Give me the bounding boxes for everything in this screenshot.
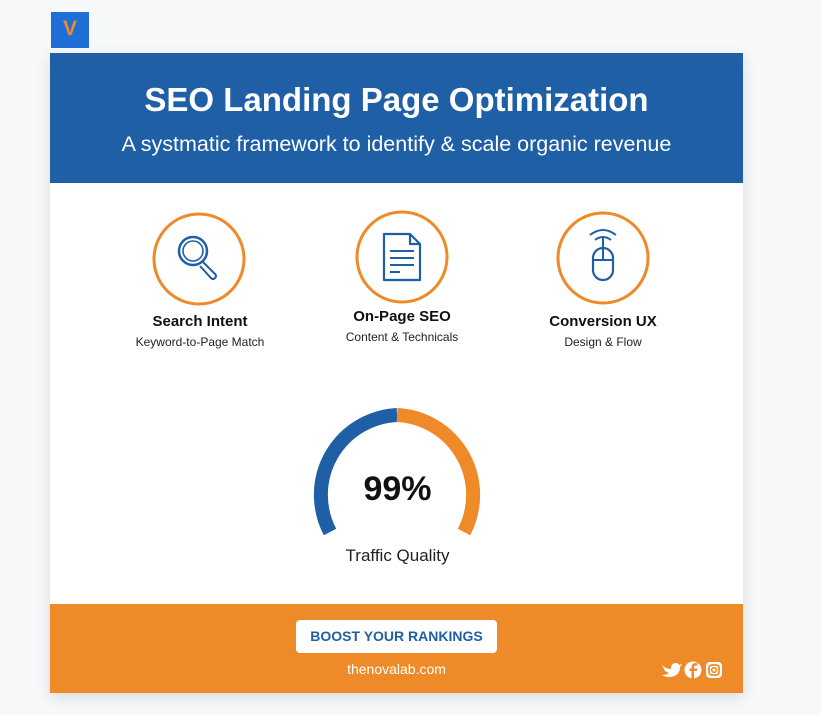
- footer band: [50, 604, 743, 693]
- button: [296, 620, 497, 653]
- icon: document: [356, 210, 448, 304]
- header band: [50, 53, 743, 183]
- panel: on-page seo: [346, 210, 458, 344]
- title: SEO Landing Page Optimization: [144, 81, 649, 118]
- label: Conversion UX: [549, 313, 657, 330]
- gauge chart: [314, 408, 480, 565]
- logo: [51, 12, 89, 48]
- card: [50, 53, 743, 693]
- logo: V: [63, 17, 77, 40]
- social icons: [662, 662, 722, 678]
- panel: on-page seo: Content & Technicals: [346, 330, 458, 344]
- icon: mouse: [556, 212, 650, 304]
- icon: magnifier: [152, 212, 246, 306]
- label: On-Page SEO: [353, 308, 451, 325]
- panel: conversion ux: [549, 212, 657, 349]
- panel: search intent: [136, 212, 264, 349]
- gauge label: Traffic Quality: [346, 546, 449, 565]
- panel: conversion ux: Design & Flow: [564, 335, 642, 349]
- website: thenovalab.com: [347, 661, 446, 677]
- subtitle: A systmatic framework to identify & scale organic revenue: [122, 132, 671, 156]
- button: BOOST YOUR RANKINGS: [310, 628, 483, 644]
- label: Search Intent: [152, 313, 248, 330]
- panel: search intent: Keyword-to-Page Match: [136, 335, 264, 349]
- value: 99%: [363, 470, 432, 508]
